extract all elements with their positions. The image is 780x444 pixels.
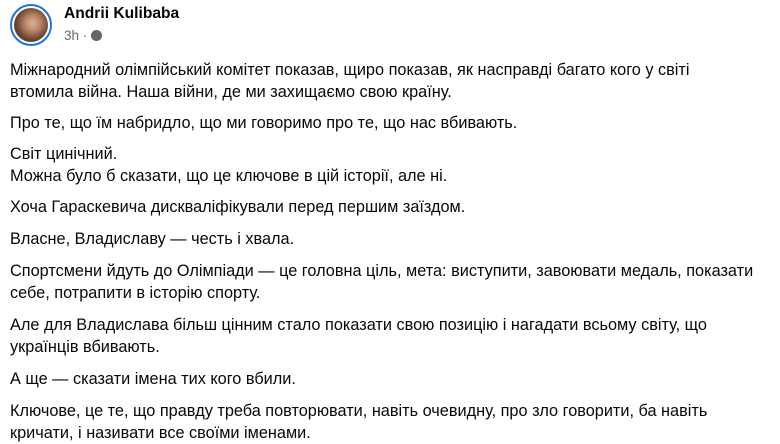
- post text: себе, потрапити в історію спорту.: [10, 284, 260, 302]
- post text: Світ цинічний.: [10, 145, 117, 163]
- timestamp: [64, 28, 102, 43]
- post text: Про те, що їм набридло, що ми говоримо про те, що нас вбивають.: [10, 114, 517, 132]
- post text: кричати, і називати все своїми іменами.: [10, 424, 311, 442]
- post text: українців вбивають.: [10, 338, 160, 356]
- post text: А ще — сказати імена тих кого вбили.: [10, 370, 296, 388]
- post text: Ключове, це те, що правду треба повторювати, навіть очевидну, про зло говорити, ба навіть: [10, 402, 707, 420]
- post text: Хоча Гараскевича дискваліфікували перед першим заїздом.: [10, 198, 465, 216]
- post text: Спортсмени йдуть до Олімпіади — це головна ціль, мета: виступити, завоювати медаль, показати: [10, 262, 753, 280]
- post text: втомила війна. Наша війни, де ми захищаємо свою країну.: [10, 83, 452, 101]
- header: [10, 4, 180, 46]
- post text: Міжнародний олімпійський комітет показав, щиро показав, як насправді багато кого у світі: [10, 61, 690, 79]
- icon: avatar: [10, 4, 52, 46]
- post text: Але для Владислава більш цінним стало показати свою позицію і нагадати всьому світу, що: [10, 316, 707, 334]
- post text: Власне, Владиславу — честь і хвала.: [10, 230, 294, 248]
- name: Andrii Kulibaba: [64, 5, 179, 22]
- post text: Можна було б сказати, що це ключове в цій історії, але ні.: [10, 167, 447, 185]
- timestamp: 3h ·: [64, 28, 87, 43]
